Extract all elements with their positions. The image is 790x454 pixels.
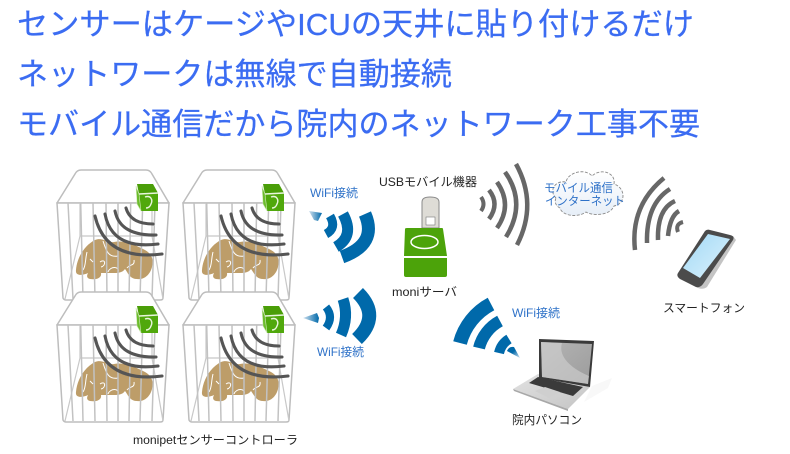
icon: gray signal to smartphone — [634, 178, 683, 250]
icon: gray signal from USB device — [481, 164, 527, 245]
icon: moni server with USB stick — [404, 197, 447, 277]
label: USB mobile device: USBモバイル機器 — [379, 175, 477, 189]
label: smartphone: スマートフォン — [663, 301, 745, 315]
icon: cloud — [553, 172, 623, 215]
label: WiFi laptop: WiFi接続 — [512, 305, 560, 320]
label: WiFi top-left: WiFi接続 — [310, 185, 358, 200]
label: clinic PC: 院内パソコン — [512, 413, 582, 427]
icon: WiFi waves from upper cages — [309, 211, 368, 257]
heading: automatic wireless: ネットワークは無線で自動接続 — [17, 57, 452, 92]
heading: mobile communication: モバイル通信だから院内のネットワーク工事不要 — [17, 107, 700, 142]
label: WiFi bottom-left: WiFi接続 — [317, 344, 364, 359]
icon: WiFi waves to laptop — [460, 304, 520, 358]
label: mobile internet: インターネット — [545, 194, 625, 208]
heading: sensor installation: センサーはケージやICUの天井に貼り付けるだけ — [17, 7, 694, 42]
cage bottom-left with dog and sensor — [57, 292, 169, 422]
cage bottom-right with dog and sensor — [183, 292, 295, 422]
label: moni server: moniサーバ — [392, 285, 457, 299]
icon: WiFi waves from lower cages — [303, 293, 369, 339]
label: mobile internet — [544, 181, 625, 208]
cage top-right with dog and sensor — [183, 170, 295, 300]
cage top-left with dog and sensor — [57, 170, 169, 300]
icon: smartphone — [677, 230, 736, 289]
label: mobile internet: モバイル通信 — [544, 181, 613, 195]
label: monipet sensor controller: monipetセンサーコントローラ — [133, 433, 298, 447]
icon: laptop — [513, 339, 612, 411]
